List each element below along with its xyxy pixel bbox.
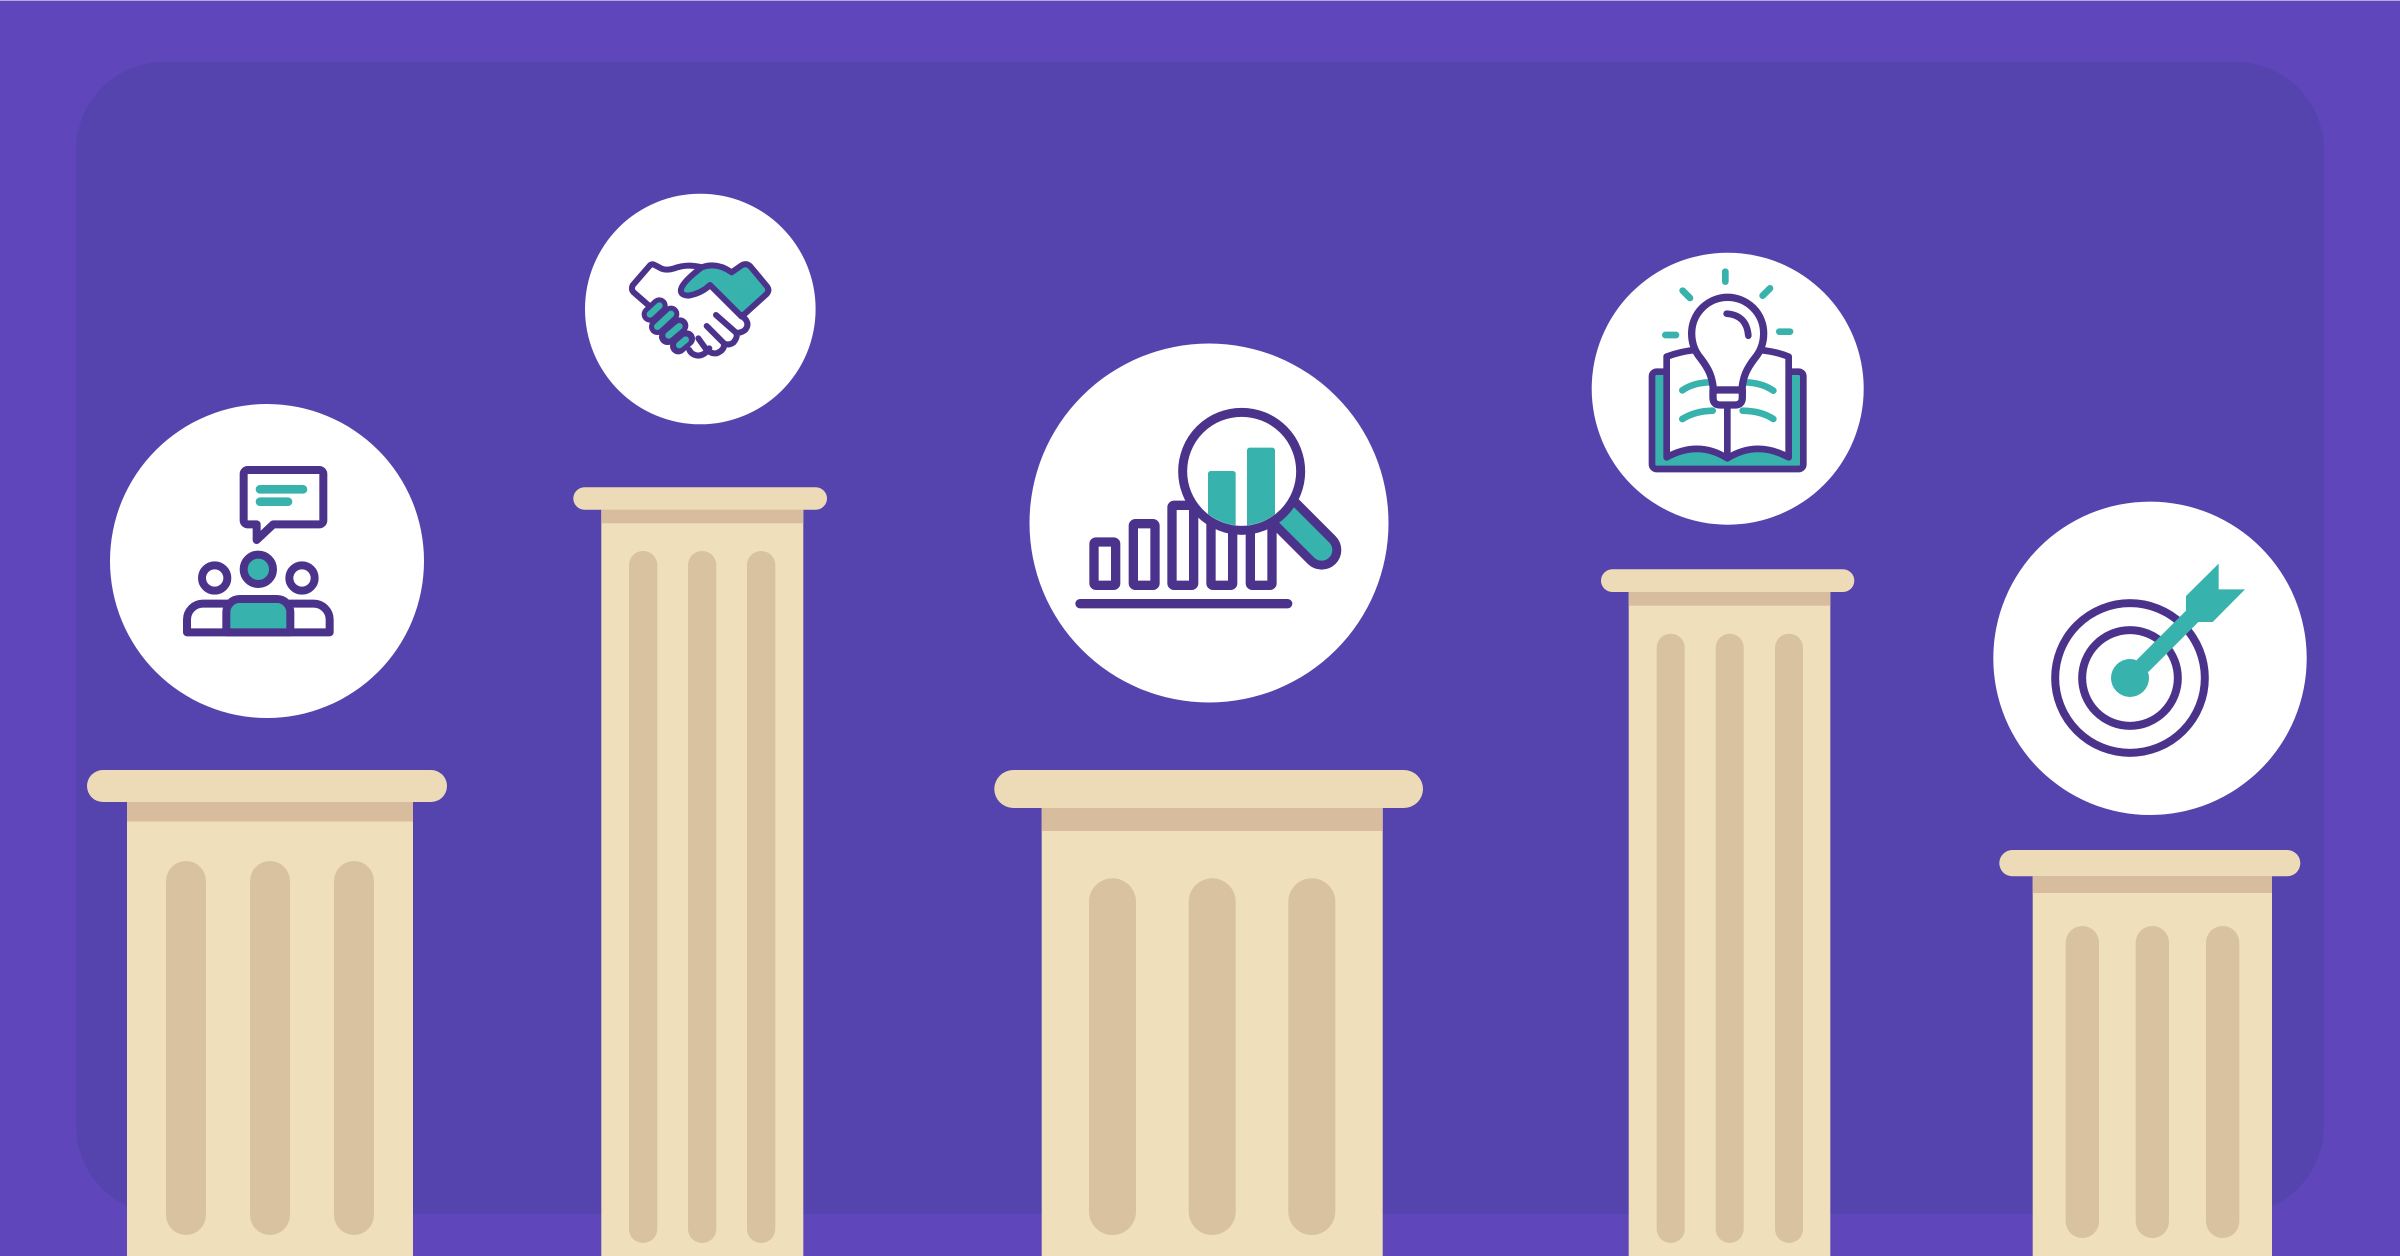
icon: chart under magnifying glass: [1030, 344, 1388, 702]
column 3: [994, 770, 1423, 1256]
column 4: [1601, 569, 1854, 1256]
column 1: [87, 770, 447, 1256]
column 5: [1999, 850, 2300, 1256]
icon: team discussion: [110, 404, 424, 718]
icon: open book with light bulb: [1592, 253, 1864, 525]
icon: handshake: [585, 194, 816, 424]
icon: target with arrow: [1993, 502, 2307, 815]
column 2: [573, 487, 827, 1256]
